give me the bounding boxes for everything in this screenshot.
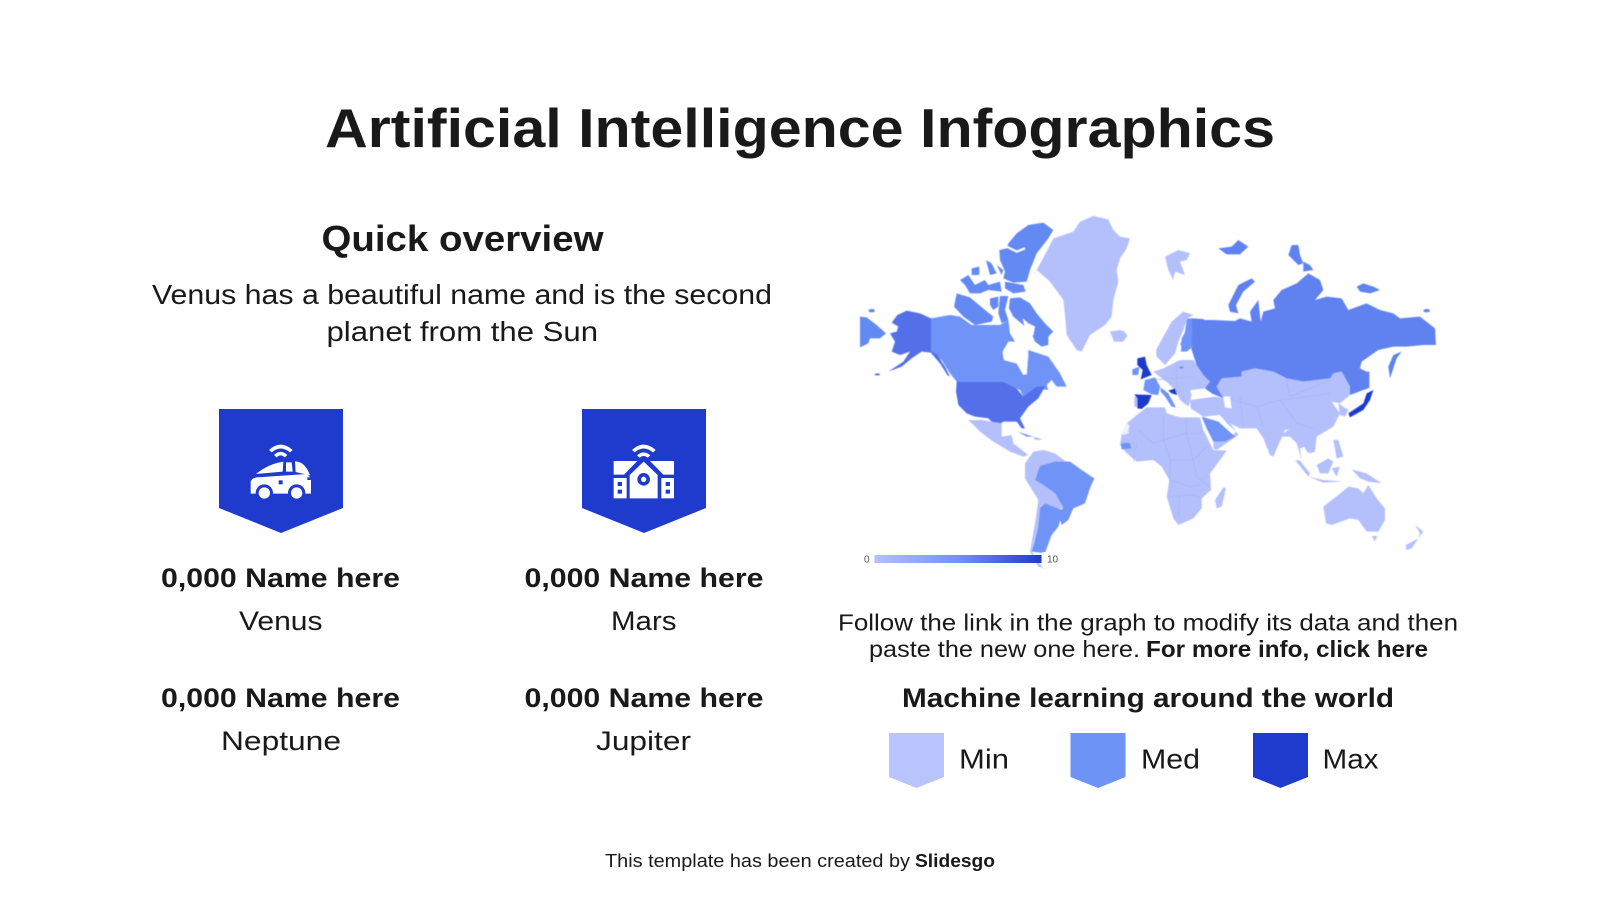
footer credit: Slidesgo — [915, 851, 995, 871]
map legend: colour scale — [864, 552, 1059, 566]
stat: Neptune: Neptune — [221, 726, 341, 756]
legend item: Max — [1253, 733, 1378, 788]
legend item: Max: Max — [1322, 744, 1378, 774]
map region: Russia north coast and Arctic islands — [1165, 240, 1436, 345]
map region: Africa — [1120, 407, 1227, 525]
stat: Venus: 0,000 Name here — [161, 563, 400, 593]
text block: map note: Follow the link in the graph to modify its data and then — [838, 610, 1458, 636]
map legend: colour scale: 10 — [1047, 554, 1059, 566]
map region: Southeast Asia and Oceania — [1280, 420, 1423, 550]
icon: car badge — [219, 409, 343, 533]
stat: Jupiter — [524, 683, 764, 756]
stat: Mars: 0,000 Name here — [524, 563, 764, 593]
legend item: Min: Min — [959, 744, 1009, 774]
legend: min, med, max — [889, 733, 1378, 788]
stat: Jupiter: Jupiter — [596, 726, 691, 756]
map legend: colour scale: 0 — [864, 554, 870, 566]
text block: map note: paste the new one here. — [869, 636, 1140, 662]
stat: Venus — [161, 563, 400, 636]
chart: world map — [860, 216, 1436, 569]
stat: Mars: Mars — [611, 606, 676, 636]
panel: quick overview — [152, 218, 772, 347]
map region: Eurasia — [1110, 312, 1435, 457]
text block: map note — [838, 610, 1458, 662]
text block: overview description: Venus has a beautiful name and is the second — [152, 279, 772, 310]
stat: Neptune — [161, 683, 400, 756]
footer credit: This template has been created by — [605, 851, 910, 871]
icon: building badge — [582, 409, 706, 533]
legend item: Med: Med — [1141, 744, 1200, 774]
text block: overview description — [152, 279, 772, 347]
legend item: Min — [889, 733, 1009, 788]
text block: overview description: planet from the Sun — [326, 316, 598, 347]
map region: North America and Greenland — [860, 216, 1130, 428]
heading: quick overview: Quick overview — [322, 218, 605, 259]
title: Artificial Intelligence Infographics — [325, 97, 1275, 159]
map region: Mexico, Central and South America — [968, 420, 1094, 569]
stat: Jupiter: 0,000 Name here — [524, 683, 764, 713]
heading: machine learning: Machine learning around the world — [902, 683, 1394, 713]
stat: Mars — [524, 563, 764, 636]
text block: map note: For more info, click here — [1146, 636, 1428, 662]
stat: Venus: Venus — [239, 606, 322, 636]
legend item: Med — [1070, 733, 1200, 788]
stat: Neptune: 0,000 Name here — [161, 683, 400, 713]
